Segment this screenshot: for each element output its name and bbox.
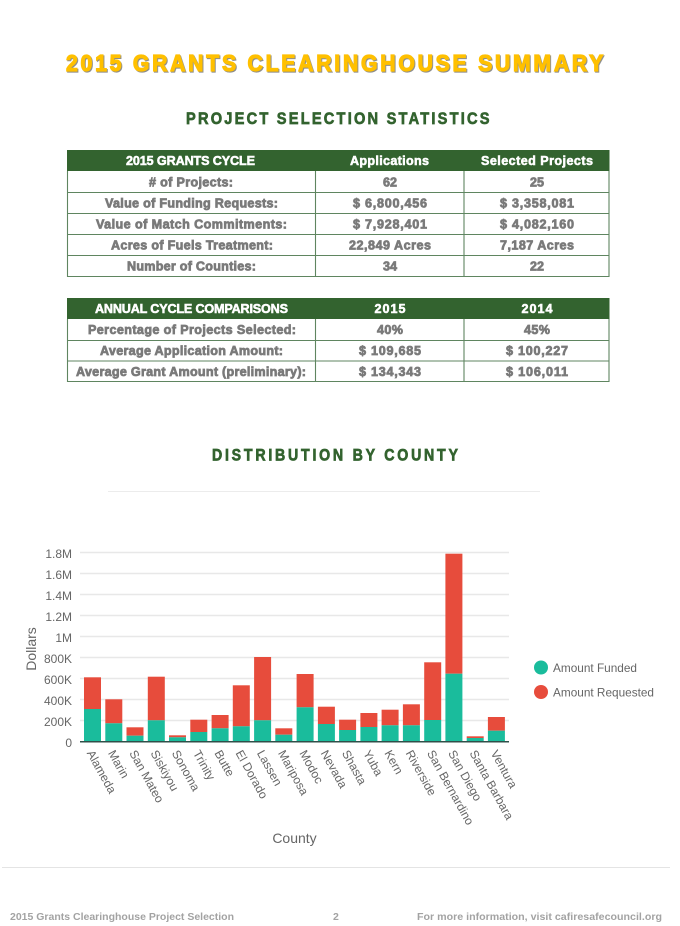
row: percentage of projects selected [88,323,550,337]
row: value of funding requests: $ 6,800,456 [353,196,427,210]
x axis county labels: El Dorado [233,748,271,801]
y axis tick labels: 1.4M [45,589,72,603]
heading: project selection statistics: PROJECT SELECTION STATISTICS [186,110,490,128]
row: number of counties: 34 [383,260,397,274]
row: acres of fuels treatment [111,238,574,252]
y axis tick labels: 1.6M [45,568,72,582]
x axis county labels: Yuba [360,748,386,779]
row: average grant amount: $ 106,011 [506,365,568,379]
x axis county labels: Santa Barbara [467,748,516,822]
x axis county labels: Kern [381,748,406,777]
x axis county labels: Riverside [403,748,439,798]
table: 2015 grants cycle [67,150,610,276]
y axis tick labels: 1M [55,631,72,645]
row: number of counties: Number of Counties: [127,260,256,274]
x axis county labels: Marin [105,748,132,781]
x axis county labels: Butte [211,748,237,779]
x axis county labels: Shasta [339,748,369,787]
row: value of funding requests [105,196,574,210]
x axis county labels: San Mateo [126,748,167,806]
y axis tick labels [44,547,72,750]
row: number of counties: 22 [530,260,544,274]
row: value of funding requests: $ 3,358,081 [500,196,574,210]
row: average grant amount [76,365,568,379]
title: 2015 GRANTS CLEARINGHOUSE SUMMARY [66,50,604,76]
header row: 2015 [374,302,406,316]
x axis county labels: Siskiyou [148,748,182,794]
x axis county labels: Modoc [296,748,326,786]
x axis county labels: Ventura [488,748,520,791]
row: number of projects: 62 [383,176,397,190]
row: number of projects: 25 [530,176,544,190]
y axis tick labels: 1.2M [45,610,72,624]
legend item: amount requested: Amount Requested [553,686,654,700]
row: average application amount: $ 109,685 [359,344,421,358]
row: value of match commitments: Value of Match Commitments: [96,218,287,232]
row: number of counties [127,260,544,274]
header row: ANNUAL CYCLE COMPARISONS [95,302,288,316]
row: acres of fuels treatment: 22,849 Acres [349,238,431,252]
x axis county labels: Sonoma [169,748,203,794]
row: percentage of projects selected: Percentage of Projects Selected: [88,323,296,337]
row: average application amount [100,344,568,358]
row: acres of fuels treatment: Acres of Fuels Treatment: [111,238,273,252]
x axis county labels [84,748,520,828]
header row: 2015 GRANTS CYCLE [126,154,255,168]
y axis tick labels: 800K [44,652,72,666]
row: percentage of projects selected: 45% [524,323,550,337]
row: value of funding requests: Value of Funding Requests: [105,196,278,210]
x axis county labels: San Bernardino [424,748,477,828]
x axis county labels: Trinity [190,748,218,783]
footer: 2 [333,911,339,923]
y axis tick labels: 1.8M [45,547,72,561]
row: average grant amount: $ 134,343 [359,365,421,379]
row: value of match commitments: $ 4,082,160 [500,218,574,232]
x axis county labels: Mariposa [275,748,312,798]
bars: amount requested [84,554,505,738]
y axis tick labels: 600K [44,673,72,687]
x axis county labels: San Diego [445,748,485,804]
header row: Selected Projects [481,154,593,168]
y axis title: Dollars [23,627,39,671]
header row: Applications [350,154,429,168]
row: average grant amount: Average Grant Amount (preliminary): [76,365,306,379]
header row: 2014 [522,302,552,316]
footer: 2015 Grants Clearinghouse Project Selection [10,911,234,923]
y axis tick labels: 200K [44,715,72,729]
row: number of projects [149,176,544,190]
row: percentage of projects selected: 40% [377,323,403,337]
x axis county labels: Nevada [318,748,350,791]
row: value of match commitments: $ 7,928,401 [353,218,427,232]
table: annual cycle comparisons [67,298,610,382]
row: average application amount: $ 100,227 [506,344,568,358]
footer [10,911,662,923]
x axis county labels: Alameda [84,748,119,796]
x axis title: County [272,830,317,846]
x axis county labels: Lassen [254,748,285,788]
header row [126,154,593,168]
stacked bar chart: distribution by county [23,547,520,846]
row: value of match commitments [96,218,574,232]
y axis tick labels: 400K [44,694,72,708]
bars: amount funded [84,674,505,742]
footer: For more information, visit cafiresafecouncil.org [417,911,662,923]
y axis tick labels: 0 [65,736,72,750]
header row [95,302,552,316]
heading: distribution by county: DISTRIBUTION BY COUNTY [212,447,458,465]
row: number of projects: # of Projects: [149,176,233,190]
legend item: amount funded: Amount Funded [553,661,637,675]
row: acres of fuels treatment: 7,187 Acres [500,238,574,252]
legend [534,660,654,700]
row: average application amount: Average Application Amount: [100,344,283,358]
